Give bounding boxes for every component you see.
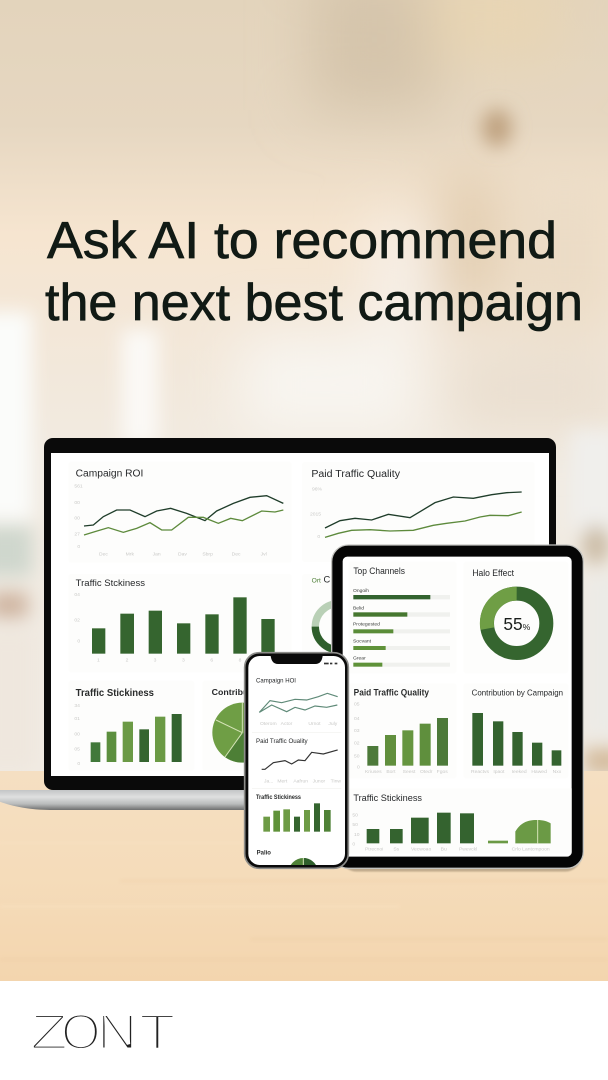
panel: Traffic Stickiness lower: 34 — [74, 703, 80, 709]
panel: Traffic Stckiness: Traffic Stckiness — [76, 578, 145, 588]
panel: Campaign ROI: 00 — [74, 516, 80, 522]
tablet shadow — [340, 553, 582, 872]
phone panel: Paid Traffic Quality: Tinw — [331, 779, 341, 785]
panel: Traffic Stckiness: 8 — [239, 657, 242, 663]
panel: Traffic Stckiness: 6 — [210, 657, 213, 663]
panel: Halo Effect: 55% — [503, 614, 531, 634]
panel: Traffic Stckiness: 02 — [74, 618, 80, 624]
blurred room background — [0, 0, 608, 780]
logo: ZONT — [30, 1003, 176, 1060]
panel: Traffic Stickiness bars: Ptrecnoi — [365, 847, 383, 853]
phone panel: Paid Traffic Quality — [252, 732, 341, 785]
panel: Campaign ROI: Jvl — [261, 552, 267, 558]
phone status icons — [324, 663, 337, 664]
phone — [245, 653, 348, 887]
panel: Traffic Stickiness bars: Vecwoao — [411, 847, 431, 853]
phone body — [245, 653, 348, 868]
logo: ZONT: T — [139, 1004, 176, 1060]
laptop — [0, 438, 556, 810]
panel: Campaign ROI: Sbrp — [202, 552, 213, 558]
panel: Traffic Stckiness — [68, 574, 292, 672]
panel: Campaign ROI: Dec — [232, 552, 241, 558]
panel: Traffic Stickiness lower: 01 — [74, 716, 80, 722]
panel: Traffic Stickiness bars: 50 — [352, 822, 358, 828]
panel: Contribution by Campaign bars: Ipaot — [493, 769, 505, 775]
panel: Campaign ROI: 27 — [74, 532, 80, 538]
phone panel: Paid Traffic Quality: Mert — [277, 779, 288, 785]
panel: Campaign ROI: Mrk — [126, 552, 134, 558]
panel: Campaign ROI: 561 — [74, 483, 83, 489]
panel: Top Channels: Ongoih — [353, 588, 369, 594]
panel: Top Channels: Protegested — [353, 621, 380, 627]
title — [45, 211, 583, 331]
panel: Paid Traffic Quality: 0 — [317, 534, 320, 540]
panel: Campaign ROI: 0 — [77, 544, 80, 550]
panel: Paid Traffic Quality bars: Paid Traffic Quality — [354, 688, 429, 698]
panel: Paid Traffic Quality bars: 0 — [357, 764, 360, 770]
panel: Traffic Stckiness: 3 — [154, 657, 157, 663]
panel: Paid Traffic Quality bars: Kriuses — [365, 769, 382, 775]
panel: Paid Traffic Quality bars: 05 — [354, 702, 360, 708]
panel: Traffic Stckiness: 2 — [126, 657, 129, 663]
panel: Contribution by Campaign bars: Reactvs — [471, 769, 490, 775]
panel: Top Channels: Socvant — [353, 639, 372, 645]
phone panel: Campaign ROI — [256, 677, 338, 727]
panel: Campaign ROI: 00 — [74, 500, 80, 506]
panel: Campaign ROI — [68, 462, 292, 563]
laptop screen — [51, 453, 549, 776]
panel: Contribution pie — [202, 681, 272, 771]
phone panel: Traffic Stickiness — [252, 788, 341, 832]
tablet body — [332, 545, 583, 868]
panel: Traffic Stickiness bars: 50 — [352, 813, 358, 819]
logo: ZONT: O — [61, 1003, 101, 1060]
panel: Traffic Stickiness bars: Pwevckl — [459, 847, 477, 853]
panel: Traffic Stickiness lower: 00 — [74, 731, 80, 737]
panel: Contribution by Campaign bars: Hawed — [531, 769, 547, 775]
phone panel: Campaign ROI: Actor — [281, 721, 293, 727]
panel: Traffic Stickiness lower: Traffic Stickiness — [76, 688, 154, 699]
phone panel: Paid Traffic Quality: Junor — [313, 779, 325, 785]
panel: Paid Traffic Quality: 96% — [312, 486, 323, 492]
panel: donut card — [302, 574, 535, 672]
panel: Traffic Stickiness bars: 10 — [354, 832, 360, 838]
panel: Paid Traffic Quality: Paid Traffic Quality — [311, 469, 400, 480]
panel: Traffic Stickiness lower — [68, 681, 194, 771]
phone panel: Paid Traffic Quality: Paid Traffic Ouality — [256, 738, 308, 745]
panel: Contribution by Campaign bars: Nxx — [553, 769, 562, 775]
footer band — [0, 981, 608, 1080]
panel: Traffic Stckiness: 1 — [97, 657, 100, 663]
panel: Traffic Stickiness bars: 0 — [352, 842, 355, 848]
title: Ask AI to recommend — [47, 211, 557, 269]
panel: Traffic Stckiness: 0 — [77, 638, 80, 644]
panel: Contribution by Campaign bars: Contribution by Campaign — [472, 688, 563, 698]
panel: Paid Traffic Quality bars: Seest — [403, 769, 416, 775]
panel: Contribution pie: Contribu — [212, 687, 248, 697]
title: the next best campaign — [45, 273, 583, 331]
panel: Paid Traffic Quality — [302, 462, 535, 562]
phone notch — [271, 656, 323, 664]
phone panel: Campaign ROI: Campaign HOI — [256, 677, 296, 684]
panel: Campaign ROI: Dec — [99, 552, 108, 558]
panel: Paid Traffic Quality bars: 03 — [354, 728, 360, 734]
panel: Paid Traffic Quality bars: Otedr — [420, 769, 433, 775]
laptop dashboard right — [302, 462, 535, 672]
panel: Paid Traffic Quality bars: 04 — [354, 716, 360, 722]
panel: Halo Effect — [463, 562, 568, 673]
panel: Campaign ROI: Campaign ROI — [76, 469, 143, 480]
panel: Traffic Stickiness lower: 05 — [74, 747, 80, 753]
panel: Top Channels — [348, 562, 457, 673]
laptop bezel — [44, 438, 556, 790]
phone screen — [248, 656, 345, 865]
phone panel: Paid Traffic Quality: Ja... — [264, 779, 273, 785]
panel: Contribution by Campaign bars — [463, 683, 568, 778]
phone panel: Traffic Stickiness: Traffic Stickiness — [256, 795, 302, 801]
panel: Halo Effect: Halo Effect — [472, 568, 514, 578]
panel: Paid Traffic Quality bars: Fgos — [437, 769, 448, 775]
phone panel: Campaign ROI: Urnot — [308, 721, 321, 727]
laptop base — [0, 790, 400, 810]
panel: donut card: Ort C — [312, 575, 331, 585]
laptop dashboard left — [68, 462, 292, 771]
phone panel: Paid Traffic Quality: Aafrun — [293, 779, 308, 785]
panel: Paid Traffic Quality bars — [348, 683, 457, 778]
panel: Campaign ROI: Jan — [153, 552, 161, 558]
phone panel: Campaign ROI: Oterom — [260, 721, 277, 727]
panel: Paid Traffic Quality bars: 02 — [354, 740, 360, 746]
panel: Campaign ROI: Dav — [178, 552, 187, 558]
panel: Traffic Stickiness bars: Bu — [441, 847, 447, 853]
panel: Traffic Stckiness: 04 — [74, 592, 80, 598]
logo: ZONT: N — [97, 1005, 137, 1060]
panel: Traffic Stickiness bars — [347, 788, 572, 853]
wooden table — [0, 771, 608, 981]
panel: Contribution by Campaign bars: Ieeked — [512, 769, 527, 775]
phone panel: Palio pie: Palio — [257, 850, 271, 856]
panel: Paid Traffic Quality bars: Bort — [386, 769, 396, 775]
panel: Traffic Stickiness bars: Crlo Lantcmpoon — [512, 847, 550, 853]
panel: Top Channels: Belid — [353, 605, 364, 611]
panel: Traffic Stickiness lower: 0 — [77, 761, 80, 767]
panel: Paid Traffic Quality bars: 50 — [354, 754, 360, 760]
phone panel: Campaign ROI: July — [328, 721, 338, 727]
panel: Paid Traffic Quality: 2015 — [310, 511, 321, 517]
logo: ZONT: Z — [30, 1004, 68, 1060]
panel: Top Channels: Grear — [353, 655, 366, 661]
panel: Traffic Stickiness bars: Traffic Stickiness — [353, 793, 423, 803]
tablet screen — [343, 557, 572, 857]
phone panel: Palio pie — [257, 850, 316, 865]
tablet — [332, 545, 583, 872]
panel: Traffic Stckiness: 3 — [182, 657, 185, 663]
panel: Traffic Stickiness bars: Ss — [393, 847, 400, 853]
panel: Top Channels: Top Channels — [353, 566, 405, 576]
